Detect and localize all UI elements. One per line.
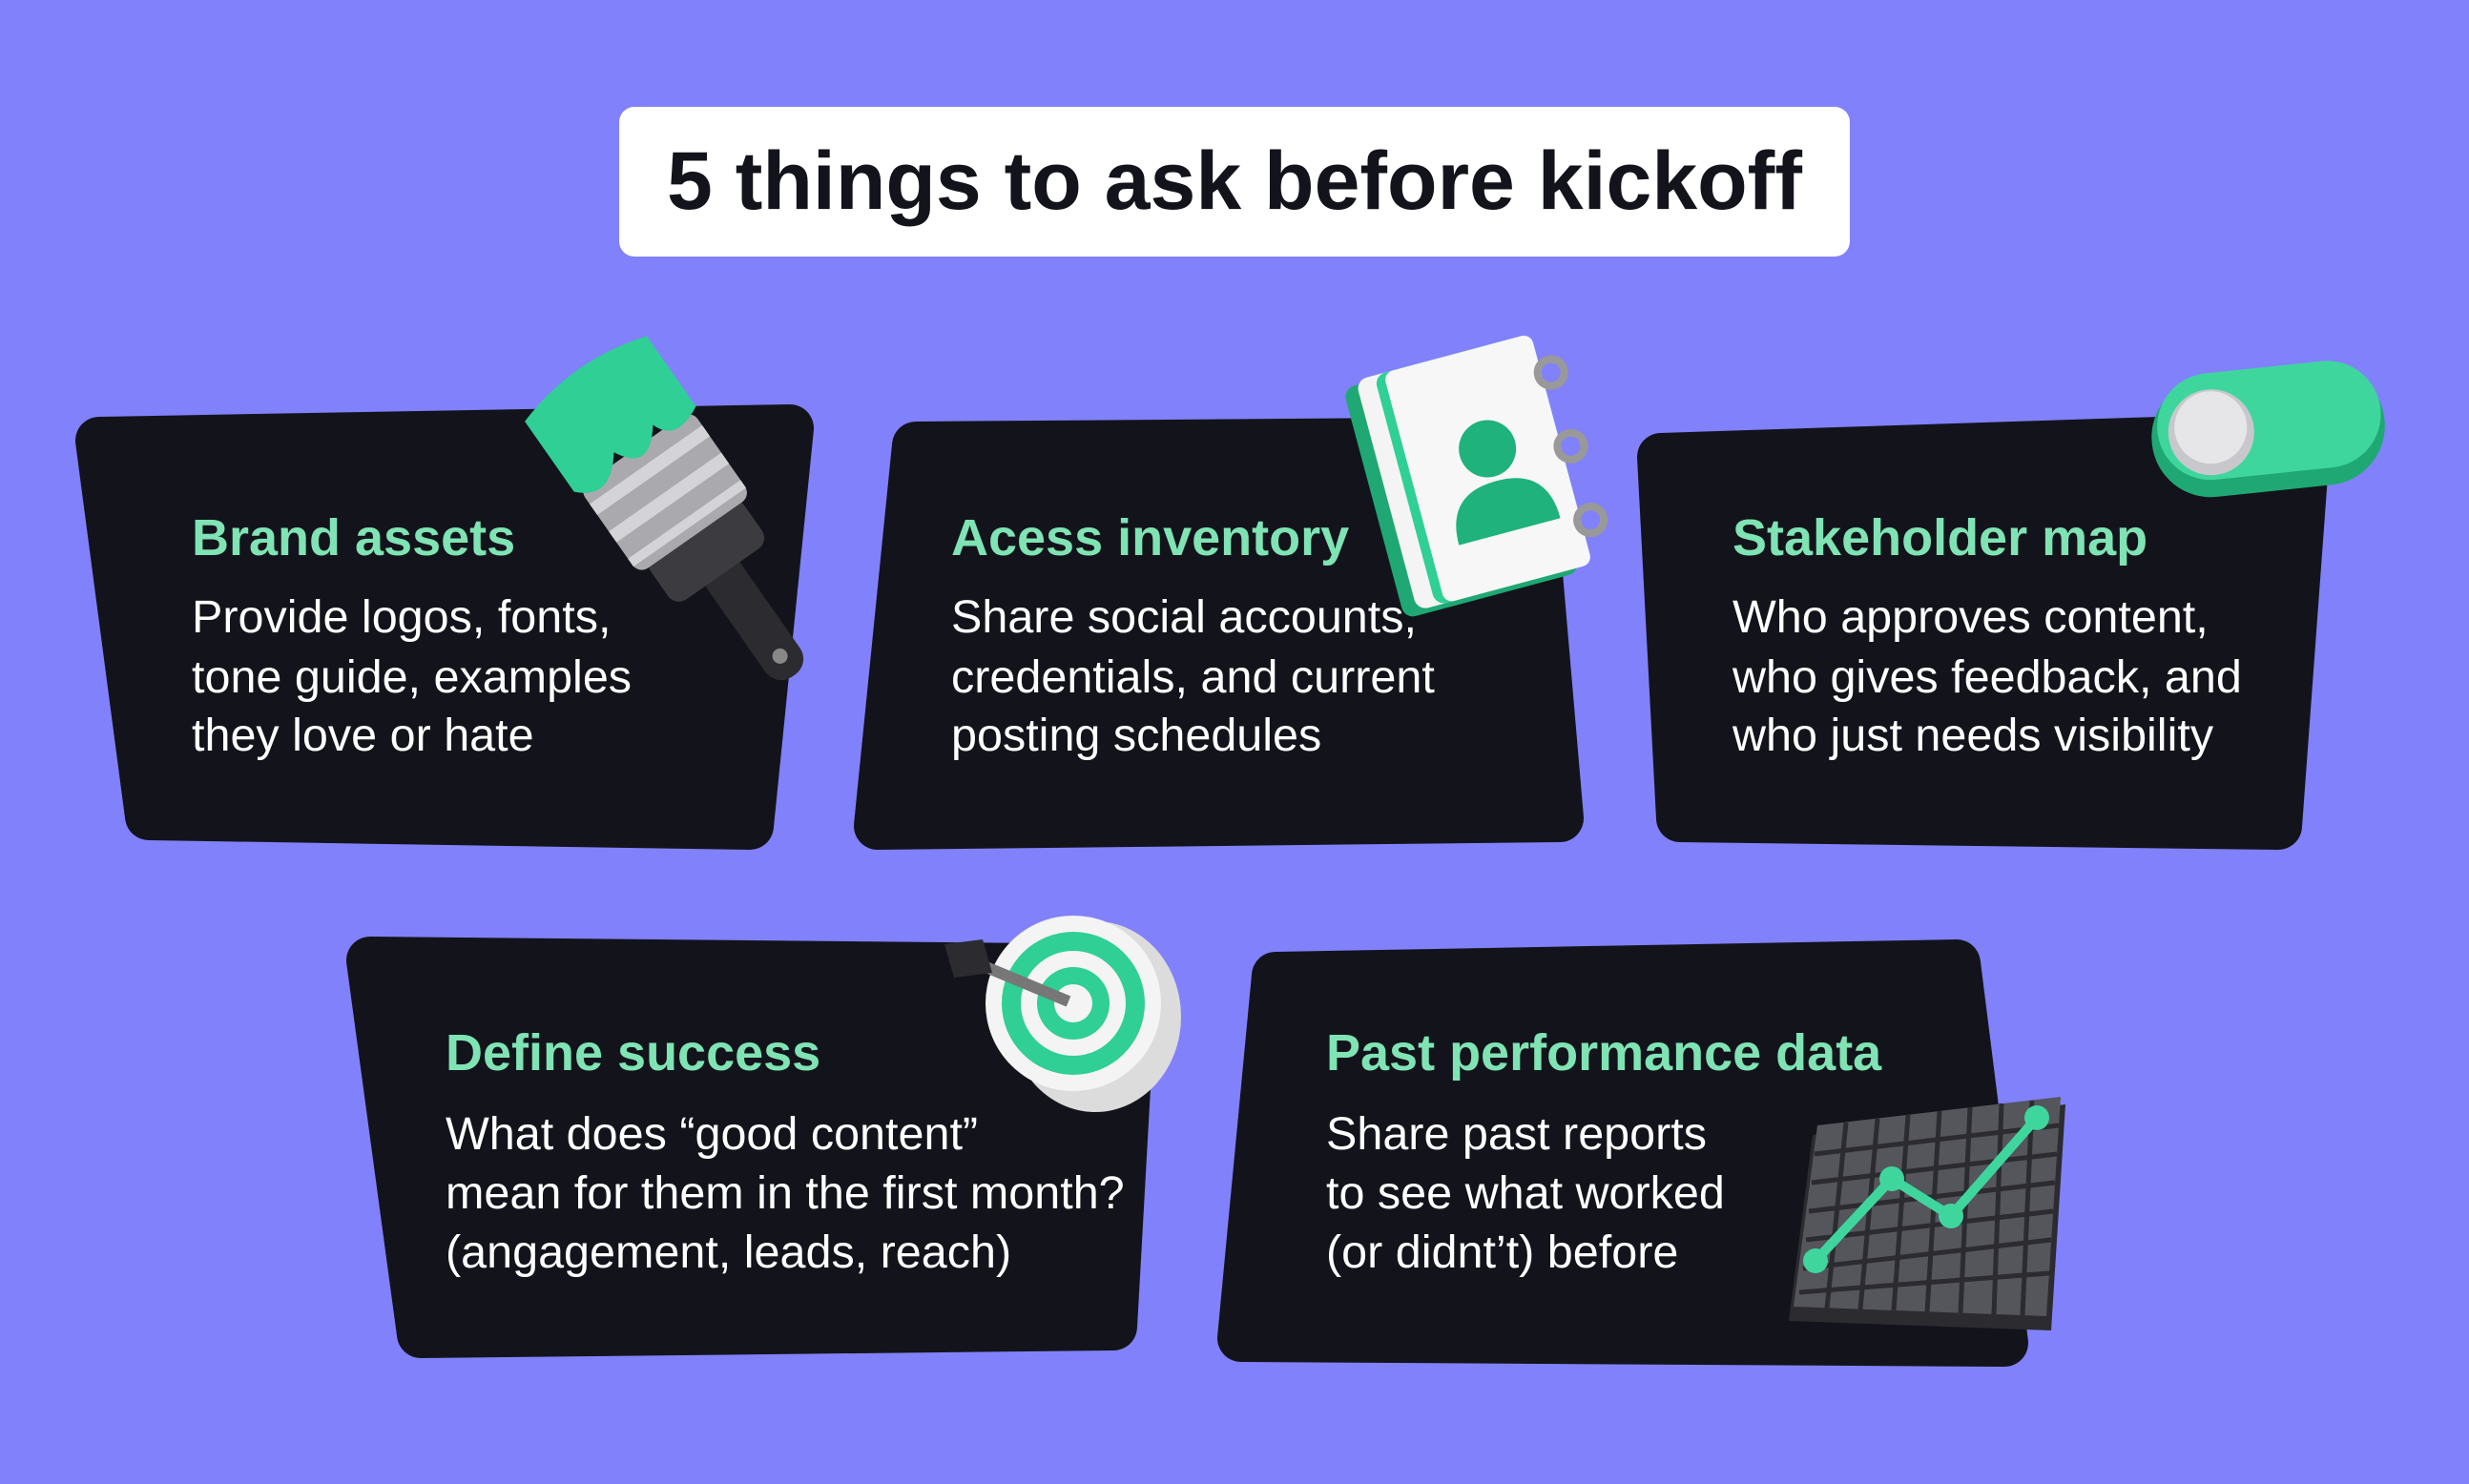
panel: define success: What does “good content” [446, 1108, 978, 1160]
panel: define success: mean for them in the first month? [446, 1167, 1125, 1219]
panel: past performance data: Past performance data [1326, 1024, 1882, 1082]
panel: define success: Define success [446, 1024, 820, 1082]
panel: access inventory: Acess inventory [951, 509, 1349, 567]
panel: past performance data: (or didnt’t) before [1326, 1226, 1678, 1278]
panel: past performance data: Share past reports [1326, 1108, 1707, 1160]
panel: brand assets: Brand assets [192, 509, 515, 567]
panel: brand assets: Provide logos, fonts, [192, 591, 611, 643]
panel: stakeholder map: who just needs visibility [1732, 710, 2214, 761]
panel: stakeholder map [1661, 436, 2307, 826]
icon: paintbrush [518, 326, 855, 718]
panel: stakeholder map: Who approves content, [1732, 591, 2209, 643]
panel: access inventory: Share social accounts, [951, 591, 1417, 643]
title [619, 107, 1850, 257]
panel: define success [370, 960, 1133, 1334]
panel: past performance data [1241, 963, 2004, 1343]
panel: access inventory: credentials, and current [951, 651, 1435, 703]
panel: access inventory: posting schedules [951, 710, 1321, 761]
panel: stakeholder map: who gives feedback, and [1732, 651, 2242, 703]
panel: access inventory [878, 441, 1560, 826]
title: 5 things to ask before kickoff [667, 135, 1802, 227]
panel: stakeholder map: Stakeholder map [1732, 509, 2147, 567]
panel: brand assets [99, 428, 790, 826]
icon: notebook [1341, 327, 1616, 619]
panel: brand assets: they love or hate [192, 710, 534, 761]
icon: target [944, 916, 1181, 1112]
panel: brand assets: tone guide, examples [192, 651, 632, 703]
icon: toggle [2146, 356, 2391, 503]
icon: line chart [1789, 1097, 2065, 1330]
panel: past performance data: to see what worked [1326, 1167, 1725, 1219]
panel: define success: (angagement, leads, reach) [446, 1226, 1011, 1278]
